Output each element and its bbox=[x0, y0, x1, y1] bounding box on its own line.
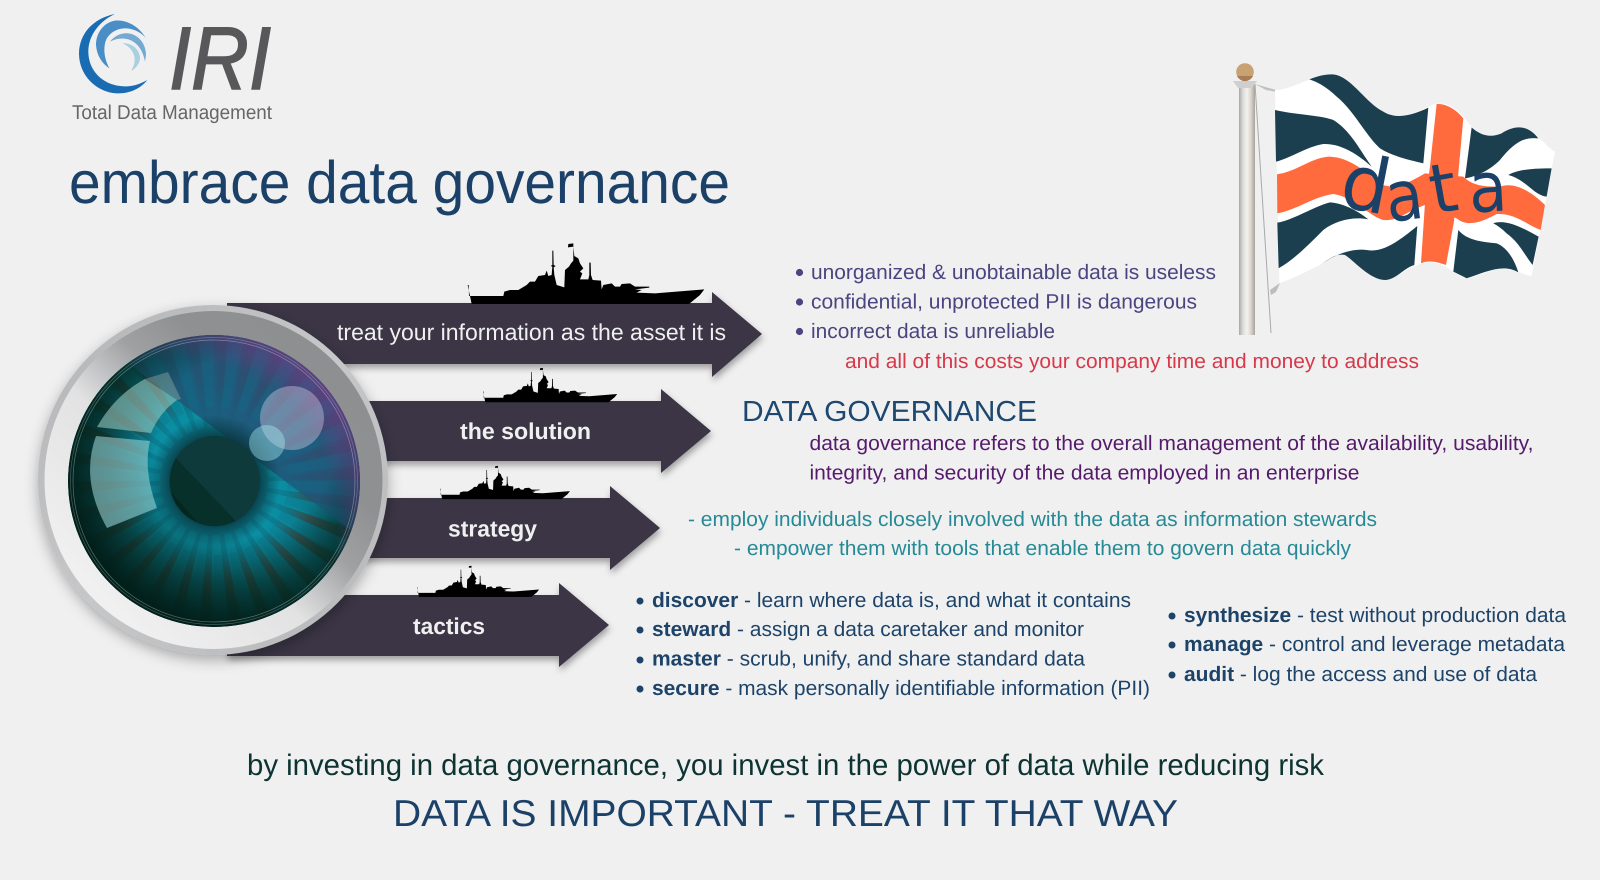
title: embrace data governance bbox=[69, 149, 730, 216]
flag word: data bbox=[1334, 136, 1509, 239]
logo tagline: Total Data Management bbox=[72, 102, 272, 124]
closing headline: DATA IS IMPORTANT - TREAT IT THAT WAY bbox=[393, 792, 1178, 834]
flag word: data: d bbox=[1334, 136, 1398, 233]
text block: strategy bbox=[688, 508, 1377, 560]
text block: strategy: - empower them with tools that enable them to govern data quickly bbox=[734, 537, 1352, 560]
heading: data governance: DATA GOVERNANCE bbox=[742, 396, 1037, 428]
arrow label: strategy bbox=[448, 516, 537, 542]
closing statement: by investing in data governance, you invest in the power of data while reducing risk bbox=[247, 749, 1324, 782]
flag word: data: t bbox=[1423, 147, 1463, 230]
arrow: strategy bbox=[227, 486, 660, 570]
logo: IRI Total Data Management bbox=[72, 8, 272, 124]
arrow: the solution bbox=[227, 389, 711, 473]
text block: tactics right: audit - log the access and use of data bbox=[1184, 663, 1537, 686]
text block: definition bbox=[810, 432, 1534, 484]
text block: tactics right: synthesize - test without production data bbox=[1184, 604, 1566, 627]
flagpole bbox=[1233, 63, 1280, 335]
text block: tactics left: steward - assign a data caretaker and monitor bbox=[652, 618, 1084, 641]
icon: battleship large bbox=[468, 243, 704, 304]
arrow label: tactics bbox=[413, 613, 485, 639]
text block: tactics left bbox=[636, 589, 1150, 700]
text block: data problems: incorrect data is unreliable bbox=[811, 320, 1055, 343]
icon: battleship strategy bbox=[440, 466, 570, 499]
text block: tactics right: manage - control and leverage metadata bbox=[1184, 633, 1565, 656]
logo wordmark: IRI bbox=[169, 8, 271, 108]
pupil bbox=[170, 436, 260, 526]
arrow: tactics bbox=[227, 583, 609, 667]
flag word: data: a bbox=[1467, 146, 1509, 229]
flag cloth bbox=[1275, 74, 1555, 283]
icon: IRI swirl bbox=[79, 14, 147, 93]
flag illustration bbox=[1233, 63, 1555, 335]
icon: battleship tactics bbox=[417, 566, 539, 597]
metal ring bbox=[38, 305, 388, 655]
text block: definition: integrity, and security of the data employed in an enterprise bbox=[810, 462, 1360, 484]
text block: tactics right bbox=[1168, 604, 1566, 686]
eye lens graphic bbox=[38, 305, 388, 655]
text block: tactics left: discover - learn where data is, and what it contains bbox=[652, 589, 1131, 612]
text block: tactics left: secure - mask personally identifiable information (PII) bbox=[652, 677, 1150, 700]
rim lines bbox=[73, 340, 355, 622]
window reflections bbox=[97, 379, 177, 433]
lens flares bbox=[260, 386, 324, 450]
arrow label: the solution bbox=[460, 418, 591, 444]
text block: data problems: unorganized & unobtainable data is useless bbox=[811, 261, 1216, 284]
flag word: data: a bbox=[1381, 154, 1427, 239]
iris bbox=[68, 335, 360, 627]
arrow: treat your information bbox=[227, 292, 762, 377]
text block: data problems bbox=[796, 261, 1216, 343]
text block: data problems: confidential, unprotected PII is dangerous bbox=[811, 290, 1197, 314]
icon: battleship solution bbox=[483, 368, 617, 402]
arrow label: treat your information as the asset it is bbox=[337, 319, 726, 345]
text block: strategy: - employ individuals closely involved with the data as information stewards bbox=[688, 508, 1377, 531]
text block: definition: data governance refers to the overall management of the availability, usability, bbox=[810, 432, 1534, 455]
text block: tactics left: master - scrub, unify, and share standard data bbox=[652, 648, 1085, 670]
callout: cost: and all of this costs your company time and money to address bbox=[845, 350, 1419, 373]
